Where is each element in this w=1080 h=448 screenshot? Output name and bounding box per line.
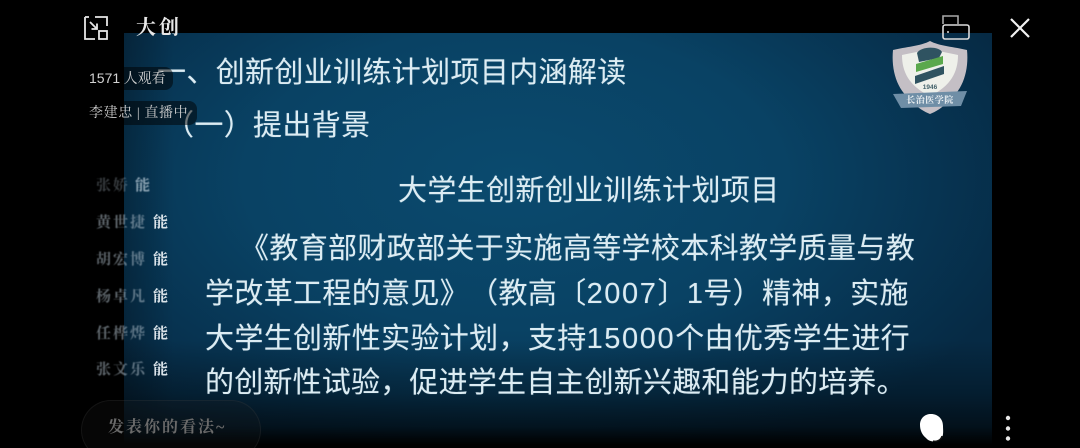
text: viewer count: 1571 人观看 <box>89 70 166 87</box>
message: 杨卓凡: 杨卓凡 <box>96 289 147 305</box>
icon: close <box>1010 18 1030 38</box>
message: 张文乐: 能 <box>153 362 168 378</box>
message: 任桦烨 <box>96 324 168 342</box>
message: 杨卓凡: 能 <box>153 289 168 305</box>
panel: host status shadow pill <box>124 101 197 125</box>
icon: lock rotation <box>942 15 970 40</box>
text block: slide body: 的创新性试验，促进学生自主创新兴趣和能力的培养。 <box>205 367 906 399</box>
message: 张文乐: 张文乐 <box>96 362 147 378</box>
icon: school emblem: 长治医学院 <box>906 93 954 106</box>
message: 胡宏博: 能 <box>153 252 168 268</box>
message: 黄世捷: 黄世捷 <box>96 215 147 231</box>
heading: slide center title: 大学生创新创业训练计划项目 <box>398 175 780 207</box>
message: 张娇: 张娇 <box>96 178 130 194</box>
text block: slide body: 学改革工程的意见》（教高〔2007〕1号）精神，实施 <box>205 278 909 310</box>
icon: school emblem: 1946 <box>923 84 938 91</box>
message: 任桦烨: 任桦烨 <box>96 326 147 342</box>
message: 任桦烨: 能 <box>153 326 168 342</box>
panel: viewer count shadow pill <box>124 67 173 90</box>
text block: slide body: 《教育部财政部关于实施高等学校本科教学质量与教 <box>240 233 915 265</box>
text block: slide body <box>205 233 915 399</box>
message: 黄世捷 <box>96 214 168 231</box>
icon: minimize window <box>84 16 108 40</box>
icon: school emblem <box>892 41 968 114</box>
icon: more menu <box>1006 416 1010 441</box>
message: 张娇: 能 <box>135 178 150 194</box>
heading: subsection: （一）提出背景 <box>165 110 370 142</box>
message: 胡宏博: 胡宏博 <box>96 252 147 268</box>
message: 黄世捷: 能 <box>153 215 168 231</box>
message: 张文乐 <box>96 360 168 378</box>
heading: room title: 大创 <box>136 17 182 39</box>
message: 张娇 <box>96 176 150 194</box>
panel: blue slide background <box>124 33 992 448</box>
message: 胡宏博 <box>96 250 168 268</box>
text: host status: 李建忠 | 直播中 <box>89 106 188 121</box>
message: 杨卓凡 <box>96 288 168 305</box>
input: comment box <box>81 400 261 448</box>
heading: section title: 一、创新创业训练计划项目内涵解读 <box>157 57 627 89</box>
icon: comment bubble <box>920 414 944 442</box>
input: comment box: 发表你的看法~ <box>108 419 226 436</box>
text block: slide body: 大学生创新性实验计划，支持15000个由优秀学生进行 <box>205 323 910 355</box>
list: chat messages <box>96 176 168 378</box>
